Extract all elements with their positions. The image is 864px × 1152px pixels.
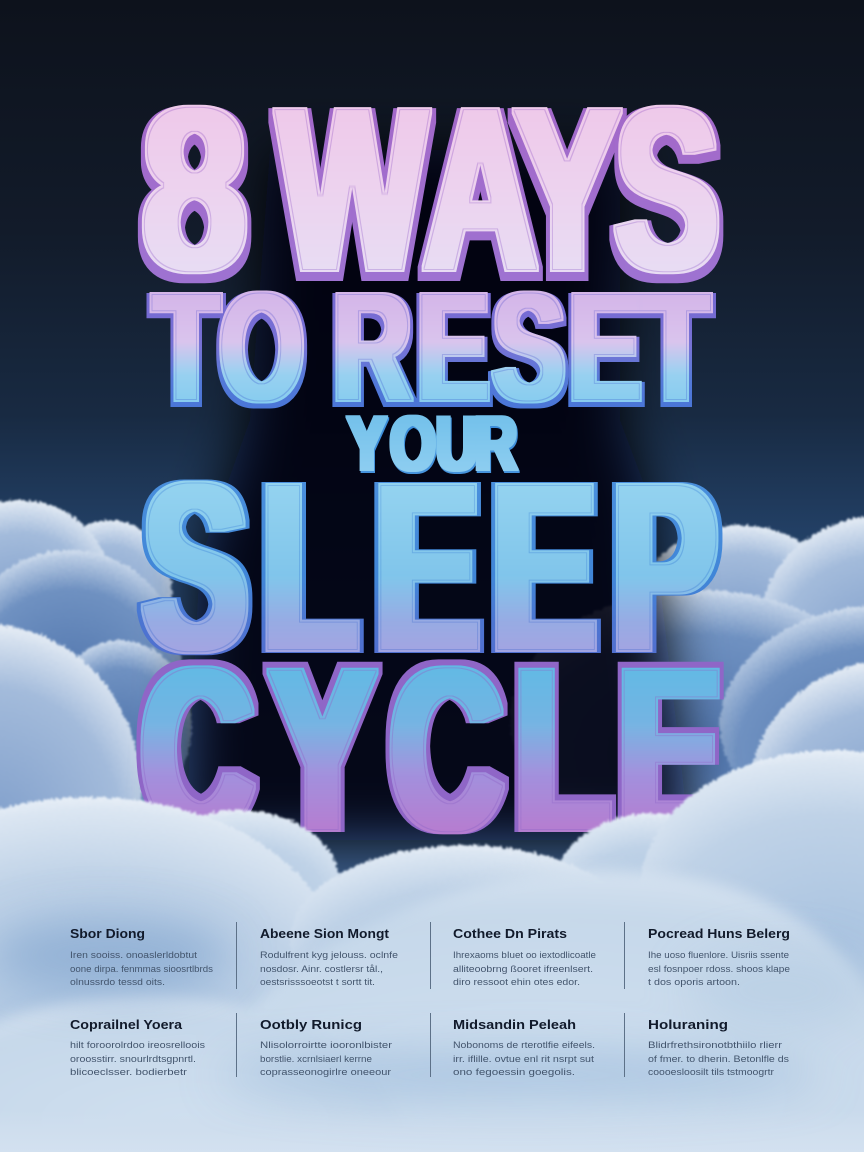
tip: Sbor Diong: Sbor Diong	[70, 926, 145, 941]
tip: Midsandin Peleah: Nobonoms de rterotlfie eifeels.	[453, 1040, 595, 1051]
tip: Holuraning	[648, 1017, 789, 1078]
title line: WAYS: WAYS	[278, 60, 719, 318]
tip: Coprailnel Yoera: blicoeclsser. bodierbetr	[70, 1067, 188, 1078]
tip: Pocread Huns Belerg	[648, 926, 790, 988]
tip: Holuraning: Blidrfrethsironotbthiilo rlierr	[648, 1040, 783, 1051]
soft blue shading under the text grid	[0, 917, 864, 1099]
tip: Pocread Huns Belerg: Pocread Huns Belerg	[648, 926, 790, 941]
divider	[430, 922, 431, 989]
divider	[624, 922, 625, 989]
title line: YOUR: YOUR	[347, 400, 517, 487]
tip: Ootbly Runicg: borstlie. xcrnlsiaerl kerrne	[260, 1054, 372, 1065]
tip: Sbor Diong: oone dirpa. fenmmas sioosrtlbrds	[70, 964, 213, 975]
tip: Holuraning: of fmer. to dherin. Betonlfle ds	[648, 1054, 789, 1065]
tip: Midsandin Peleah: irr. iflille. ovtue enl rit nsrpt sut	[453, 1054, 594, 1065]
tip: Abeene Sion Mongt: oestsrisssoeotst t sortt tit.	[260, 977, 375, 988]
tip: Pocread Huns Belerg: esl fosnpoer rdoss. shoos klape	[648, 964, 790, 975]
tip: Coprailnel Yoera: hilt foroorolrdoo ireosrelloois	[70, 1040, 205, 1051]
front pale cloud layer	[0, 870, 864, 1152]
tip: Cothee Dn Pirats: Ihrexaoms bIuet oo iextodlicoatle	[453, 950, 596, 961]
title line: 8: 8	[142, 60, 247, 318]
title line: CYCLE: CYCLE	[141, 620, 722, 878]
title	[141, 60, 722, 878]
tip: Abeene Sion Mongt: nosdosr. Ainr. costlersr tål.,	[260, 964, 383, 975]
tip: Coprailnel Yoera: Coprailnel Yoera	[70, 1017, 183, 1032]
divider	[236, 1013, 237, 1077]
tip: Midsandin Peleah: ono fegoessin goegolis.	[453, 1067, 575, 1078]
tip: Cothee Dn Pirats: alliteoobrng ßooret ifreenlsert.	[453, 964, 593, 975]
divider	[624, 1013, 625, 1077]
tip: Sbor Diong: olnussrdo tessd oits.	[70, 977, 165, 988]
tip: Holuraning: coooesloosilt tils tstmoogrtr	[648, 1067, 775, 1078]
tip: Pocread Huns Belerg: t dos oporis artoon.	[648, 977, 740, 988]
back clouds: left and right banks	[0, 500, 864, 965]
tip: Ootbly Runicg: Nlisolorroirtte iooronlbister	[260, 1040, 393, 1051]
tip: Sbor Diong	[70, 926, 213, 988]
tip: Cothee Dn Pirats: diro ressoot ehin otes edor.	[453, 977, 580, 988]
divider	[430, 1013, 431, 1077]
tip: Sbor Diong: Iren sooiss. onoaslerldobtut	[70, 950, 197, 961]
title line: SLEEP: SLEEP	[143, 434, 717, 700]
tip: Midsandin Peleah	[453, 1017, 595, 1078]
tip: Midsandin Peleah: Midsandin Peleah	[453, 1017, 576, 1032]
divider	[236, 922, 237, 989]
tip: Coprailnel Yoera: oroosstirr. snourlrdtsgpnrtl.	[70, 1054, 196, 1065]
dark shadow behind title	[185, 150, 690, 840]
tip: Abeene Sion Mongt: Abeene Sion Mongt	[260, 926, 390, 941]
tip: Cothee Dn Pirats	[453, 926, 596, 988]
bottom fade of the cloud bank	[0, 1110, 864, 1152]
tip: Holuraning: Holuraning	[648, 1017, 728, 1032]
tip: Abeene Sion Mongt	[260, 926, 398, 988]
tip: Pocread Huns Belerg: Ihe uoso fluenlore. Uisriis ssente	[648, 950, 789, 961]
tip: Ootbly Runicg	[260, 1017, 393, 1078]
tip: Abeene Sion Mongt: Rodulfrent kyg jelouss. oclnfe	[260, 950, 398, 961]
tip: Ootbly Runicg: coprasseonogirlre oneeour	[260, 1067, 392, 1078]
tip: Ootbly Runicg: Ootbly Runicg	[260, 1017, 362, 1032]
tip: Cothee Dn Pirats: Cothee Dn Pirats	[453, 926, 567, 941]
tip: Coprailnel Yoera	[70, 1017, 205, 1078]
title line: TO RESET: TORESET	[153, 262, 709, 434]
foreground clouds	[0, 750, 864, 1143]
tips grid	[70, 922, 790, 1078]
